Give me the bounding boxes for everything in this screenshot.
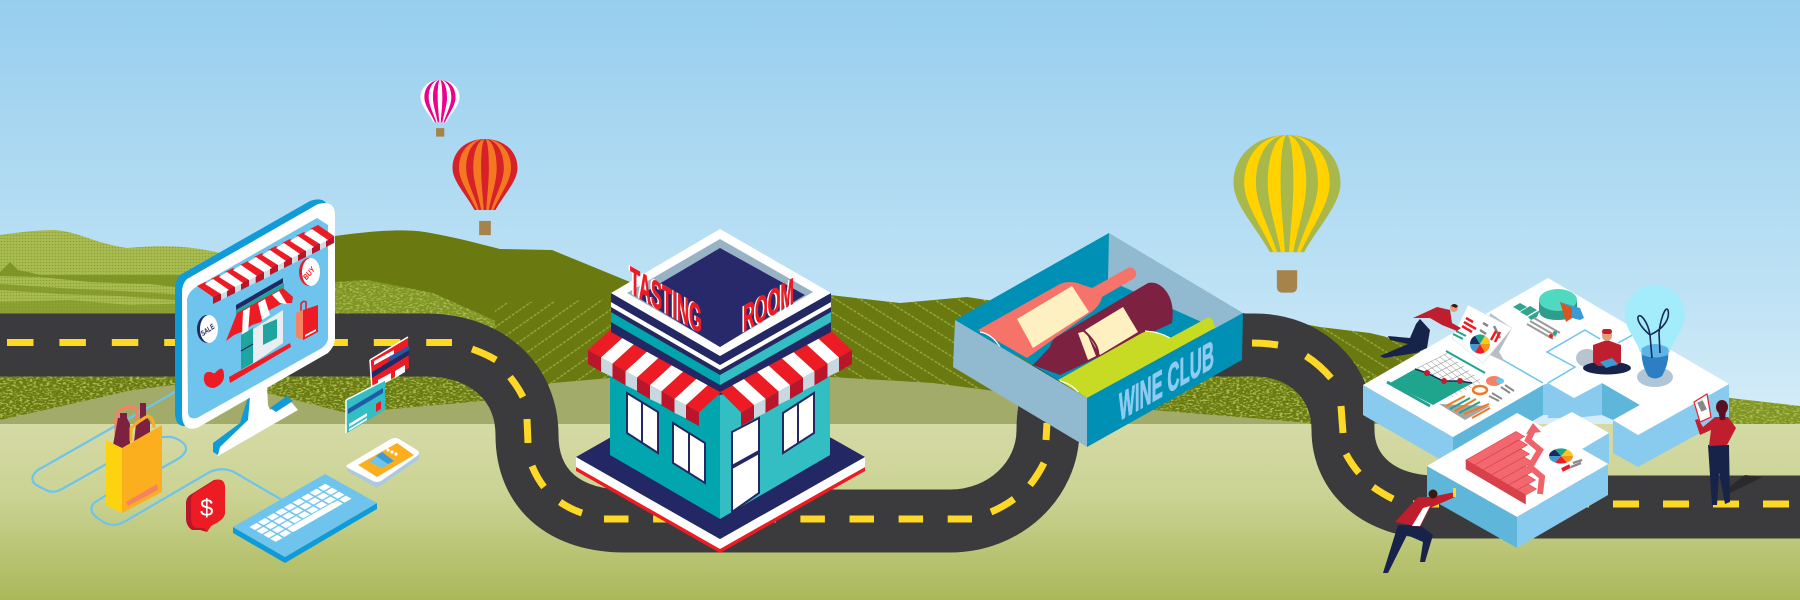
mottled vineyard below road, left bbox=[0, 376, 500, 424]
rose bottle bbox=[978, 268, 1136, 358]
door bbox=[732, 418, 759, 512]
light bulb bbox=[1625, 285, 1685, 387]
tasting sign bbox=[628, 257, 702, 342]
credit card: red bbox=[370, 337, 409, 390]
pale mid field bbox=[0, 377, 1310, 424]
mottled vineyard below road, centre right bbox=[1130, 376, 1400, 424]
red bar chart bbox=[1466, 432, 1536, 504]
red wine bottle bbox=[1033, 283, 1173, 375]
online shop group bbox=[32, 199, 419, 563]
road centre dashes bbox=[7, 342, 1800, 519]
base platform bbox=[576, 375, 865, 553]
textured slope behind the road bbox=[335, 280, 500, 340]
walls bbox=[610, 373, 720, 519]
box interior bbox=[955, 233, 1109, 360]
sale badge bbox=[197, 315, 218, 343]
roof bands bbox=[611, 293, 831, 392]
right halftone field bbox=[1700, 395, 1800, 424]
left vineyard bands bbox=[0, 262, 200, 314]
buy badge bbox=[299, 258, 320, 286]
monitor body bbox=[175, 199, 335, 429]
wine club box bbox=[953, 233, 1243, 447]
tasting room building bbox=[576, 229, 865, 553]
hot air balloon: pink bbox=[420, 80, 460, 137]
price tag speech bubble bbox=[186, 480, 225, 532]
left halftone hill bbox=[0, 230, 262, 330]
heart icon bbox=[204, 369, 224, 388]
sky bbox=[0, 0, 1800, 424]
smartphone bbox=[346, 438, 419, 488]
wine shopping bag bbox=[106, 403, 162, 513]
cables bbox=[32, 392, 282, 525]
left block analytics sheet bbox=[1387, 351, 1514, 420]
monitor awning bbox=[197, 225, 340, 304]
dark hill bbox=[300, 230, 665, 350]
flying businessman bbox=[1380, 304, 1461, 358]
box front walls bbox=[953, 320, 1087, 447]
white wine bottle bbox=[1058, 318, 1215, 398]
price tag speech bubble: $ bbox=[200, 495, 213, 522]
left awning bbox=[588, 329, 722, 426]
tablet with report bbox=[1452, 305, 1512, 363]
winding road bbox=[0, 342, 1800, 521]
pushing businessman bbox=[1383, 488, 1456, 573]
rising red arrow bbox=[1526, 423, 1542, 494]
wine club box: WINE CLUB bbox=[1119, 332, 1214, 429]
buy badge: BUY bbox=[301, 265, 317, 282]
ground bbox=[0, 424, 1800, 600]
landscape: vineyard hills bbox=[0, 230, 1800, 424]
room sign bbox=[742, 270, 794, 341]
vineyard rows right of tasting room bbox=[620, 295, 1420, 424]
sale badge: SALE bbox=[199, 322, 217, 338]
tasting room building: TASTING bbox=[630, 258, 702, 342]
right awning bbox=[720, 329, 852, 426]
hot air balloon: red and orange bbox=[452, 139, 518, 235]
roof top bbox=[611, 229, 831, 356]
tasting room building: ROOM bbox=[743, 270, 794, 340]
keyboard bbox=[233, 474, 377, 563]
shop icon on screen bbox=[226, 278, 293, 383]
lower block top bbox=[1427, 412, 1609, 517]
shopping bag icon on screen bbox=[296, 301, 318, 340]
standing woman with clipboard bbox=[1694, 394, 1763, 505]
tasting room building: ROOM bbox=[742, 271, 793, 341]
connector lines bbox=[1503, 330, 1638, 383]
windows bbox=[627, 393, 814, 483]
platform white top bbox=[1363, 278, 1729, 437]
3d pie chart bbox=[1539, 289, 1584, 322]
vineyard rows left of tasting room bbox=[495, 299, 630, 400]
lower block sides bbox=[1427, 433, 1609, 548]
step bars and legend bbox=[1513, 303, 1560, 339]
data analytics platform bbox=[1363, 278, 1763, 573]
hot air balloon: yellow and olive bbox=[1234, 135, 1340, 293]
sitting person bbox=[1576, 329, 1631, 374]
credit card: teal bbox=[346, 380, 385, 433]
tasting room building: TASTING bbox=[629, 257, 701, 342]
platform top block sides bbox=[1363, 383, 1729, 467]
monitor stand bbox=[213, 385, 298, 456]
small pie and legend bbox=[1549, 448, 1582, 470]
